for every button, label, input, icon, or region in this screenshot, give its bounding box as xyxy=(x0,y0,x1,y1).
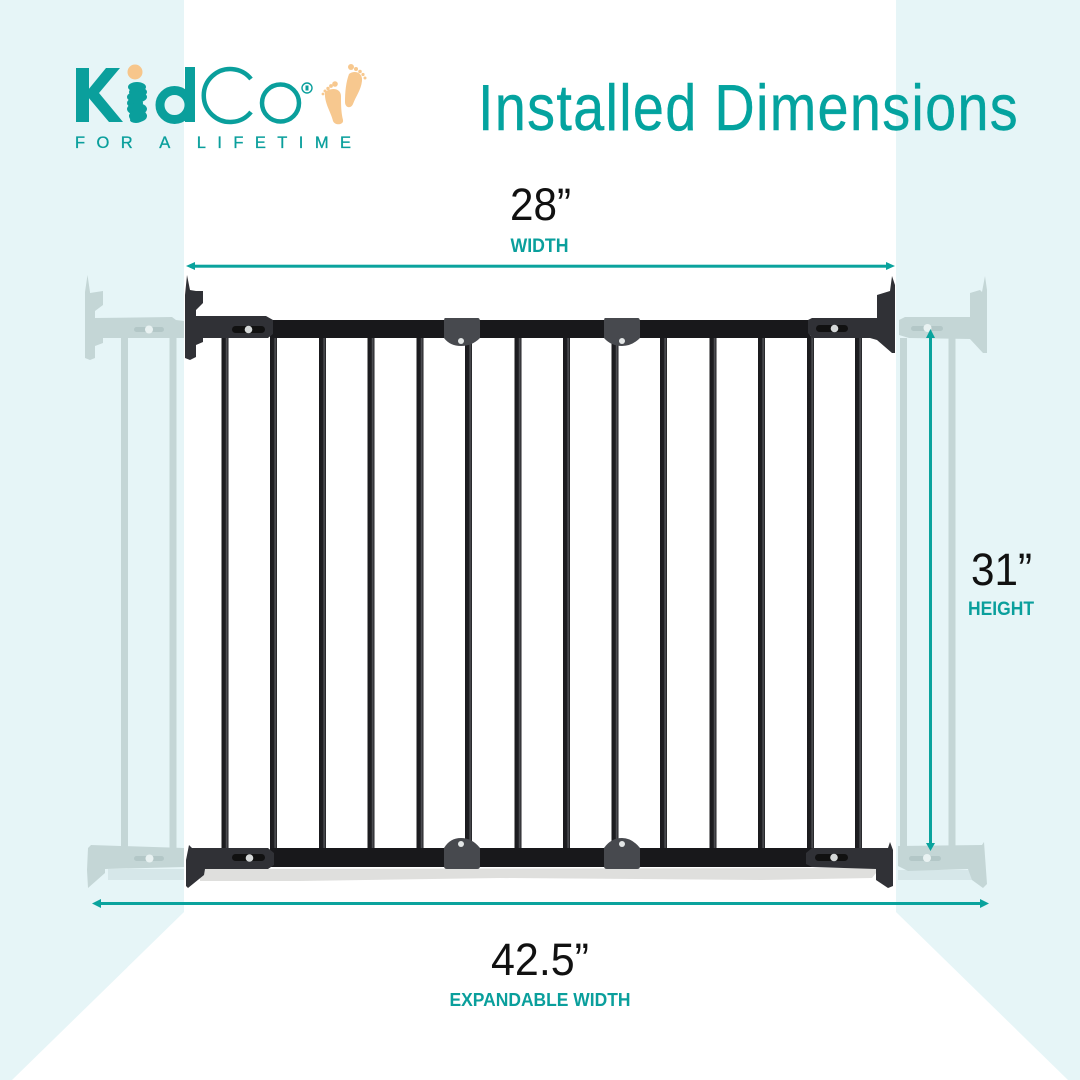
panel: right wall background xyxy=(896,0,1080,1080)
label: 42.5 inch expandable width: 42.5” xyxy=(491,934,589,985)
top rail xyxy=(270,320,810,338)
arrow: height xyxy=(926,329,935,851)
logo: KidCo xyxy=(75,64,366,152)
ghost extension: left xyxy=(85,275,184,888)
gate xyxy=(185,275,895,888)
logo tagline: FOR A LIFETIME xyxy=(75,134,351,152)
left bottom bracket xyxy=(186,845,274,888)
top centre latches xyxy=(444,318,640,346)
right bottom bracket xyxy=(806,842,893,888)
gate bars xyxy=(222,336,862,850)
logo wordmark xyxy=(76,67,312,123)
icon: i dot xyxy=(128,64,142,80)
left top bracket xyxy=(185,275,273,360)
right top bracket xyxy=(808,276,895,353)
ghost extension: right xyxy=(898,276,987,888)
label: 42.5 inch expandable width: EXPANDABLE WIDTH xyxy=(450,989,630,1010)
label: 28 inch width xyxy=(510,179,571,257)
arrow: width xyxy=(186,262,895,270)
icon: baby feet xyxy=(322,64,366,124)
label: 31 inch height: HEIGHT xyxy=(968,599,1034,620)
label: 31 inch height: 31” xyxy=(971,544,1032,595)
label: 28 inch width: 28” xyxy=(510,179,571,230)
label: 28 inch width: WIDTH xyxy=(510,235,568,257)
label: 42.5 inch expandable width xyxy=(450,934,630,1010)
label: 31 inch height xyxy=(968,544,1034,620)
bottom centre latches xyxy=(444,838,640,869)
arrow: expandable width xyxy=(92,899,989,908)
bottom rail xyxy=(270,848,815,867)
panel: left wall background xyxy=(0,0,184,1080)
floor shadow xyxy=(200,868,880,881)
